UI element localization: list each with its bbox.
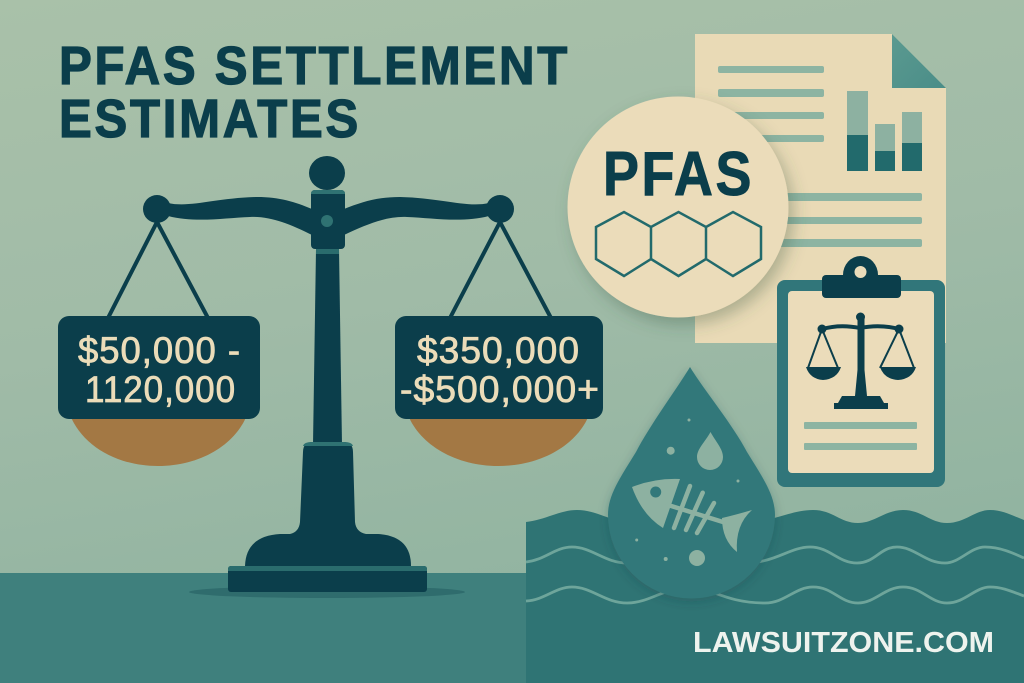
title: PFAS SETTLEMENT (59, 36, 570, 96)
left pan (70, 415, 247, 466)
wave line lower (526, 587, 1024, 603)
wave line upper (526, 547, 1024, 563)
scale beam (168, 197, 312, 235)
document fold (892, 34, 946, 88)
document text lines top (718, 66, 824, 142)
left value panel: 1120,000 (85, 369, 236, 410)
icon: fish skeleton (632, 479, 752, 552)
clipboard (777, 256, 945, 487)
website footer: LAWSUITZONE.COM (693, 627, 994, 659)
bubbles (635, 418, 740, 566)
right value panel (395, 316, 603, 419)
water waves (526, 510, 1024, 683)
clipboard lines (804, 422, 917, 450)
icon: droplet (697, 432, 723, 470)
scale centre block (311, 190, 345, 249)
PFAS badge: PFAS (603, 140, 754, 209)
water drop (608, 367, 775, 598)
right pan (408, 415, 589, 466)
right value panel: $350,000 (417, 330, 580, 371)
right value panel: -$500,000+ (400, 369, 600, 410)
title (59, 36, 570, 149)
document bar chart (847, 91, 922, 171)
scale: large balance (58, 156, 603, 598)
document text lines bottom (760, 193, 922, 247)
scale shadow (189, 586, 465, 598)
document (695, 34, 946, 343)
PFAS badge (568, 96, 788, 318)
hexagon chain (596, 212, 761, 276)
clipboard clip (843, 256, 878, 275)
title: ESTIMATES (59, 89, 361, 149)
scale top knob (309, 156, 345, 190)
scale pillar (313, 249, 342, 445)
scale base (245, 442, 411, 566)
icon: small scale (806, 312, 916, 409)
right strings (450, 222, 551, 318)
left strings (108, 222, 208, 318)
left value panel: $50,000 - (78, 330, 241, 371)
left value panel (58, 316, 260, 419)
floor (0, 573, 527, 683)
